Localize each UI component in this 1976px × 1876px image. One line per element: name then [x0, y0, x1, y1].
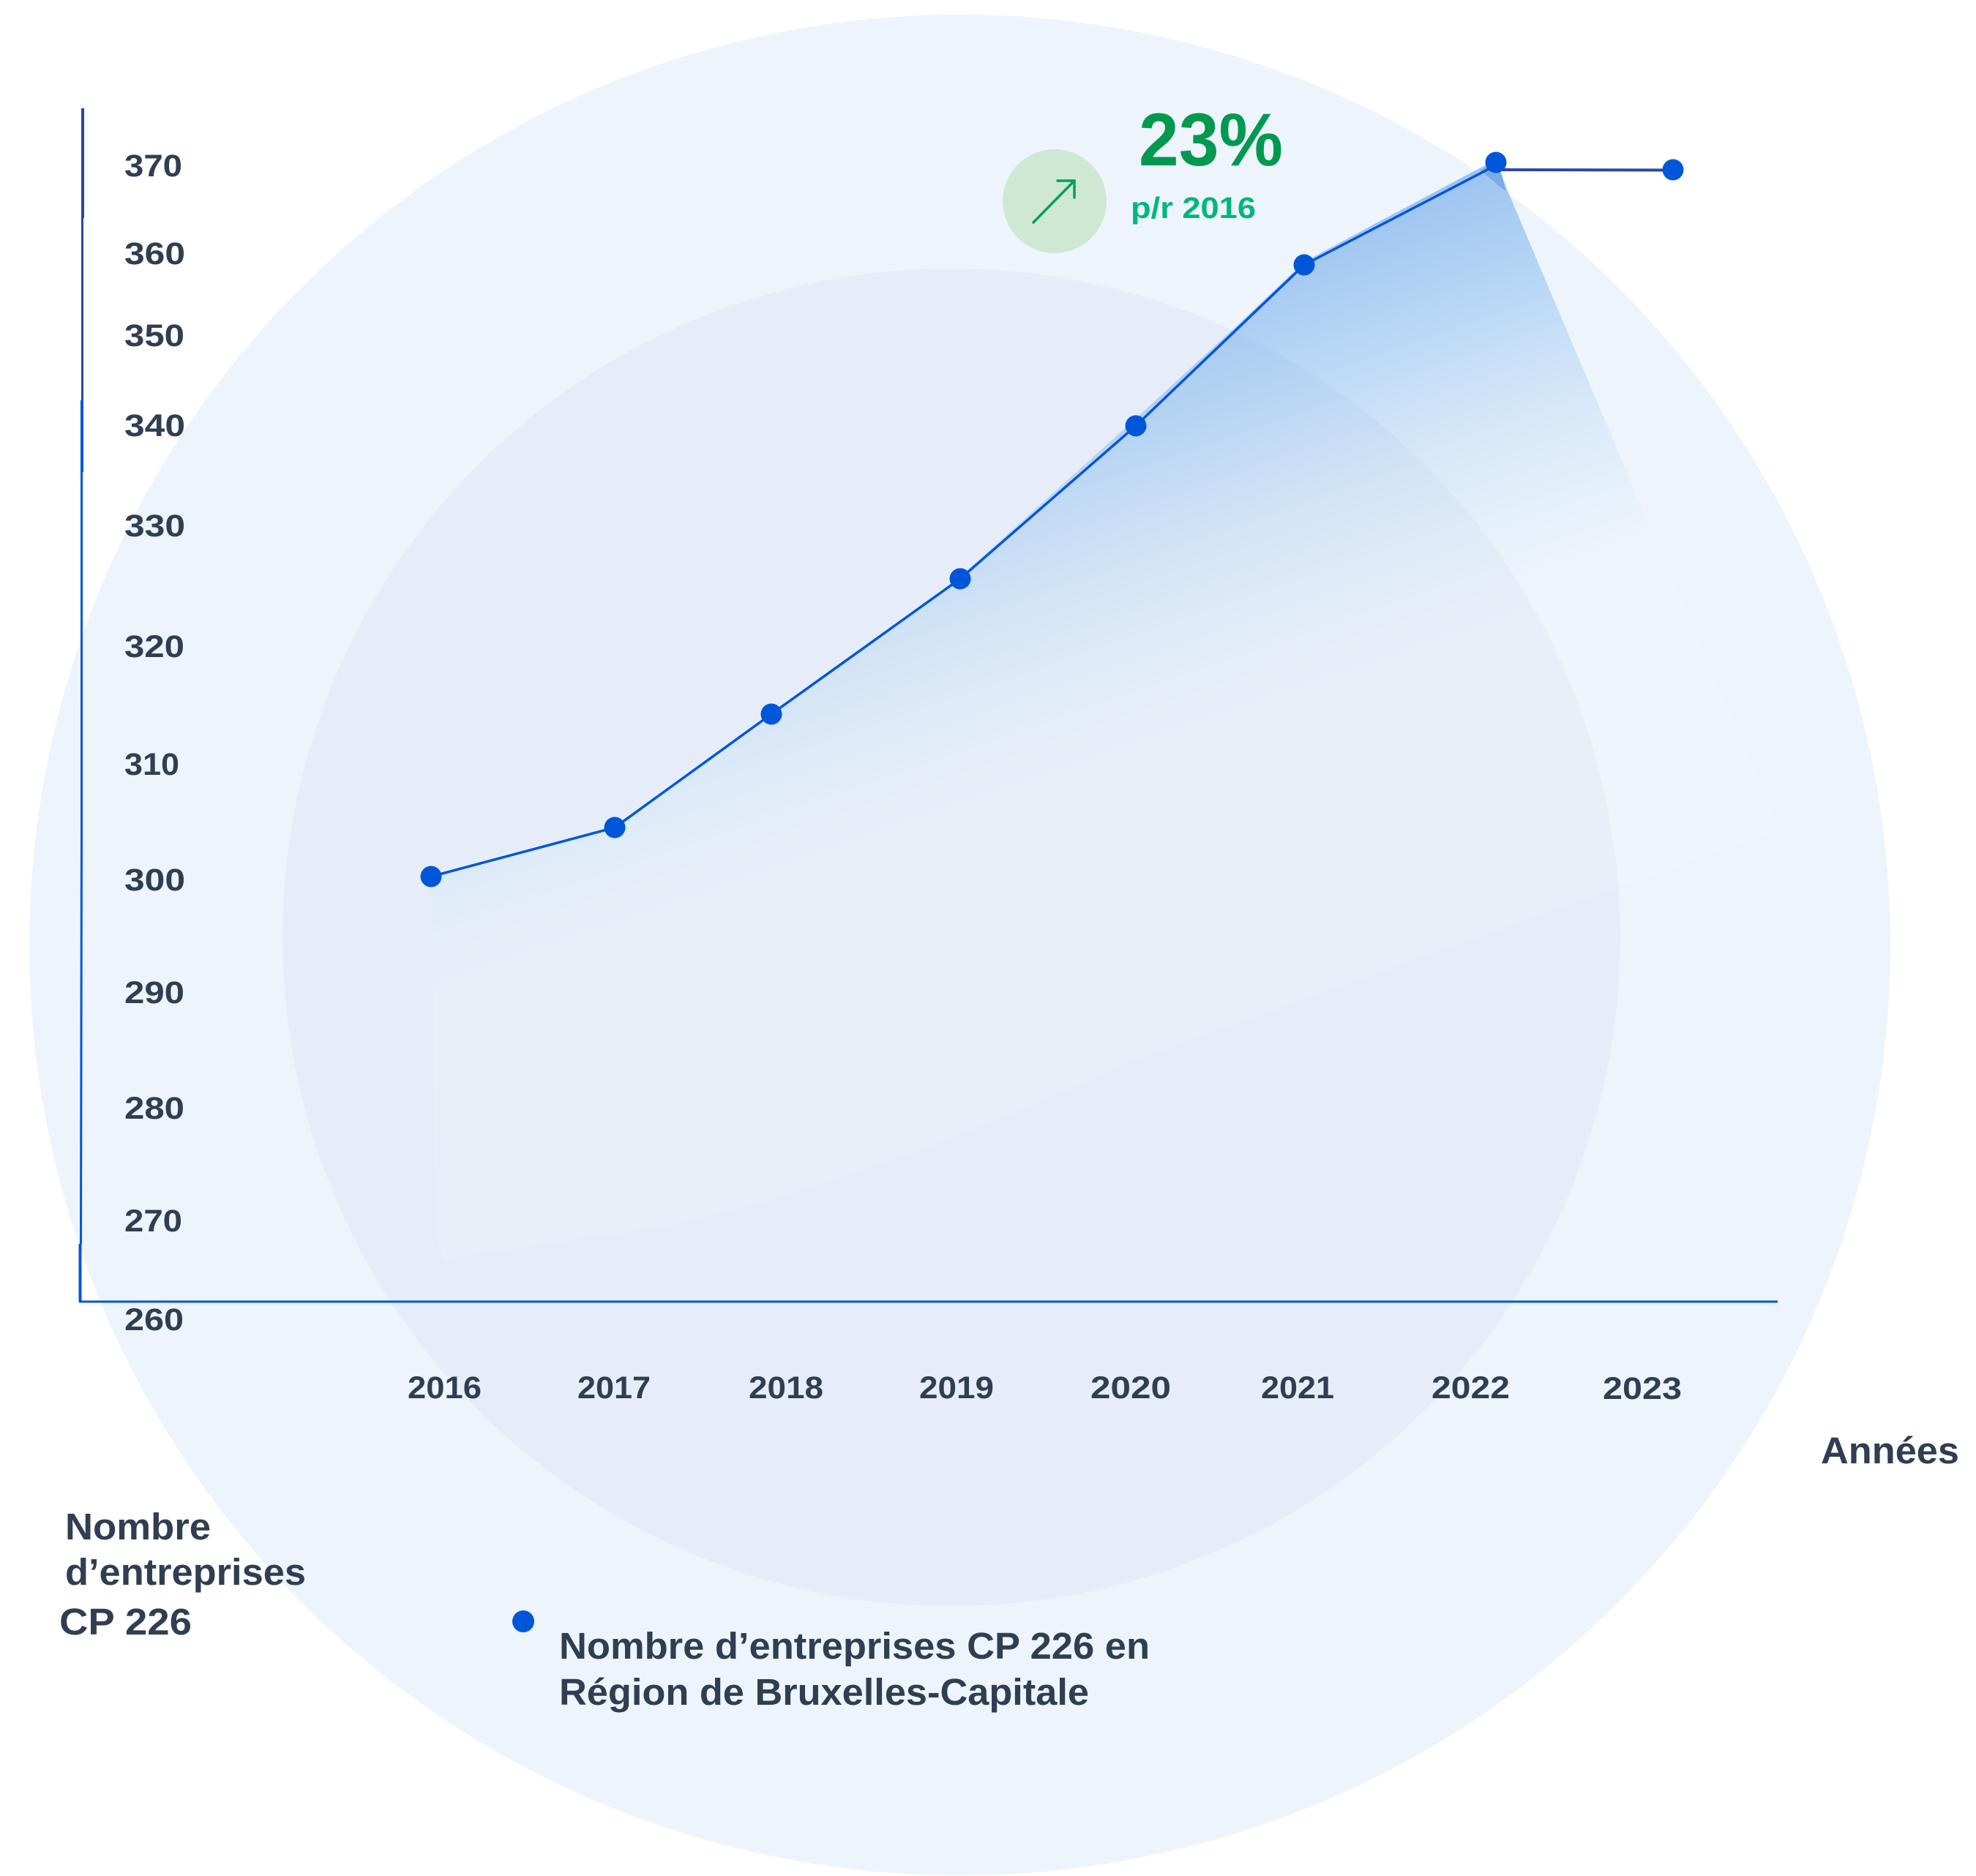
x axis labels: 2019: [919, 1370, 994, 1406]
area fill under the line: [431, 160, 1780, 1260]
legend marker: [512, 1610, 534, 1632]
y axis title: d’entreprises: [65, 1551, 306, 1593]
y axis: [81, 108, 83, 1302]
y axis labels: 370: [124, 149, 182, 184]
y axis labels: 290: [124, 975, 184, 1010]
y axis labels: 320: [124, 629, 184, 664]
x axis labels: 2016: [408, 1370, 482, 1406]
x axis: [79, 1301, 1778, 1302]
callout: 23%: 23%: [1139, 98, 1283, 181]
y axis title: [59, 1506, 306, 1643]
y axis title: Nombre: [65, 1506, 211, 1547]
callout: p/r 2016: p/r 2016: [1131, 191, 1256, 225]
x axis labels: 2021: [1261, 1370, 1334, 1406]
y axis labels: 340: [124, 408, 185, 443]
legend text: Nombre d’entreprises CP 226 en: [559, 1625, 1150, 1667]
line series 2016 to 2022: [431, 168, 1490, 877]
line segment 2022 to 2023: [1490, 168, 1673, 171]
icon: upward trend arrow in green circle: [1003, 149, 1107, 253]
x axis labels: 2022: [1432, 1370, 1510, 1406]
background: inner circle: [282, 269, 1620, 1606]
x axis labels: 2017: [577, 1370, 651, 1406]
legend text: Région de Bruxelles-Capitale: [559, 1671, 1089, 1713]
legend: [512, 1610, 1150, 1713]
x axis labels: 2020: [1090, 1370, 1171, 1406]
x axis labels: 2023: [1603, 1371, 1682, 1406]
area fill tip outside the large circle: [1480, 162, 1506, 192]
y axis title: CP 226: [59, 1601, 192, 1643]
y axis labels: 280: [124, 1091, 184, 1126]
y axis labels: [124, 149, 185, 1337]
y axis labels: 310: [124, 747, 179, 782]
y axis labels: 300: [124, 863, 185, 898]
y axis labels: 270: [124, 1204, 182, 1239]
data points: [420, 152, 1683, 887]
y axis labels: 360: [124, 236, 185, 271]
y axis labels: 350: [124, 318, 184, 353]
y axis labels: 330: [124, 509, 185, 544]
x axis title: Années: [1821, 1430, 1959, 1471]
y axis labels: 260: [124, 1302, 184, 1337]
x axis labels: 2018: [749, 1370, 823, 1406]
legend text: [559, 1625, 1150, 1713]
x axis labels: [408, 1370, 1682, 1406]
